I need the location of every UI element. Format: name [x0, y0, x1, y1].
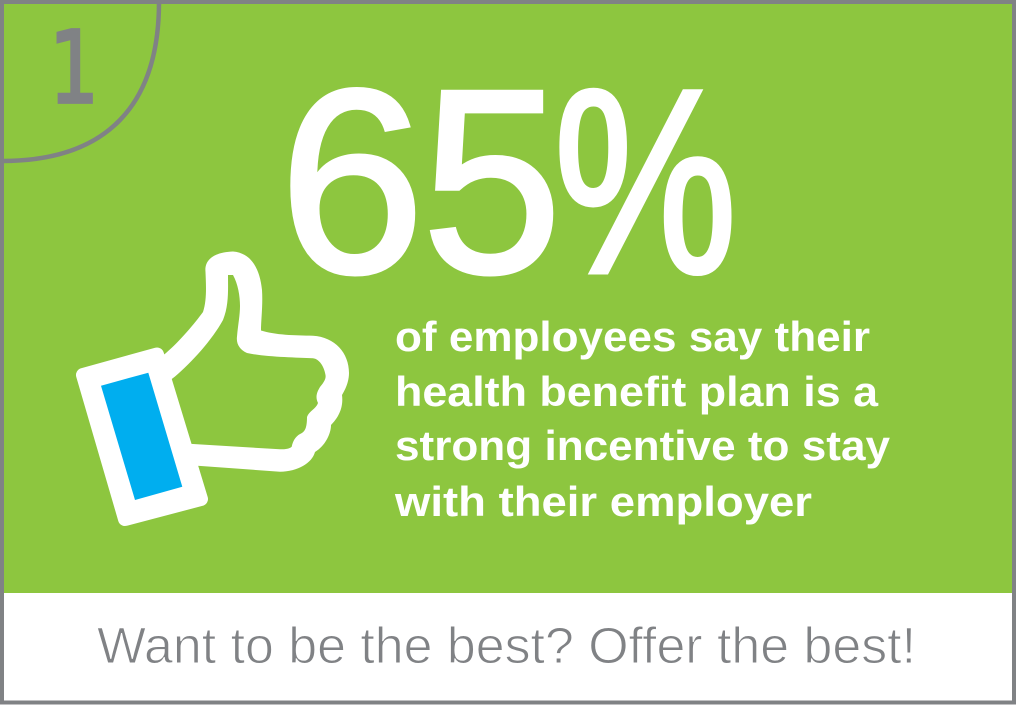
thumb and fist outline [155, 252, 349, 472]
digit 6: 6 [279, 35, 425, 328]
icon: thumbs up [83, 252, 349, 519]
line 1: of employees say their [395, 313, 870, 360]
badge quarter circle [2, 2, 159, 161]
line 4: with their employer [394, 478, 812, 525]
panel: white footer [0, 593, 1016, 705]
percent sign: % [554, 35, 737, 328]
line 3: strong incentive to stay [395, 422, 891, 469]
line 2: health benefit plan is a [395, 368, 879, 415]
statistic description [394, 313, 891, 525]
digit 5: 5 [422, 36, 562, 328]
badge number: 1 [49, 10, 99, 126]
number badge [2, 2, 159, 161]
sleeve cuff [83, 354, 201, 519]
footer tagline: Want to be the best? Offer the best! [97, 617, 916, 674]
big statistic 65% [279, 35, 737, 328]
blue cuff panel [101, 373, 182, 500]
